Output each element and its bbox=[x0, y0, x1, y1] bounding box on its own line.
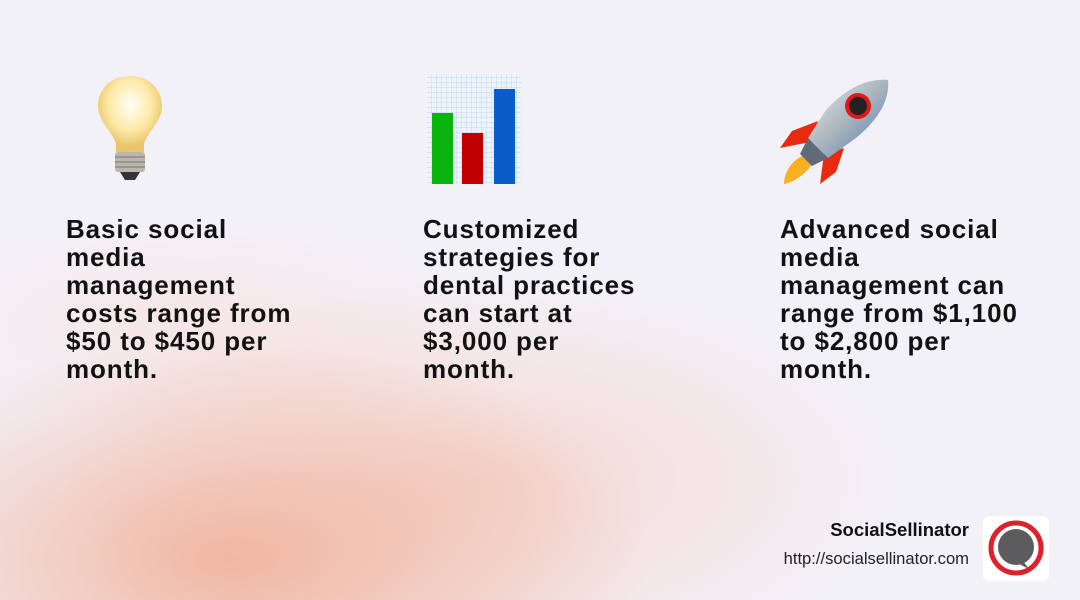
icon: bar chart bbox=[427, 74, 521, 184]
brand url: http://socialsellinator.com bbox=[784, 549, 969, 568]
text: basic cost: management bbox=[66, 270, 235, 300]
text: advanced cost: to $2,800 per bbox=[780, 326, 951, 356]
text: customized strategies: dental practices bbox=[423, 270, 635, 300]
text: advanced cost: media bbox=[780, 242, 860, 272]
text: basic cost: month. bbox=[66, 354, 158, 384]
text: basic cost: costs range from bbox=[66, 298, 291, 328]
text: advanced cost: month. bbox=[780, 354, 872, 384]
text: customized strategies: month. bbox=[423, 354, 515, 384]
text: advanced cost: range from $1,100 bbox=[780, 298, 1018, 328]
text: customized strategies bbox=[423, 214, 635, 384]
logo bbox=[983, 516, 1049, 581]
text: customized strategies: can start at bbox=[423, 298, 573, 328]
text: customized strategies: Customized bbox=[423, 214, 579, 244]
text: advanced cost: management can bbox=[780, 270, 1005, 300]
text: basic cost bbox=[66, 214, 291, 384]
icon: rocket bbox=[780, 80, 888, 184]
text: basic cost: Basic social bbox=[66, 214, 227, 244]
text: basic cost: $50 to $450 per bbox=[66, 326, 267, 356]
text: customized strategies: $3,000 per bbox=[423, 326, 559, 356]
text: advanced cost bbox=[780, 214, 1018, 384]
text: advanced cost: Advanced social bbox=[780, 214, 999, 244]
brand name: SocialSellinator bbox=[830, 519, 969, 540]
text: basic cost: media bbox=[66, 242, 146, 272]
icon: lightbulb bbox=[98, 76, 162, 180]
text: customized strategies: strategies for bbox=[423, 242, 600, 272]
